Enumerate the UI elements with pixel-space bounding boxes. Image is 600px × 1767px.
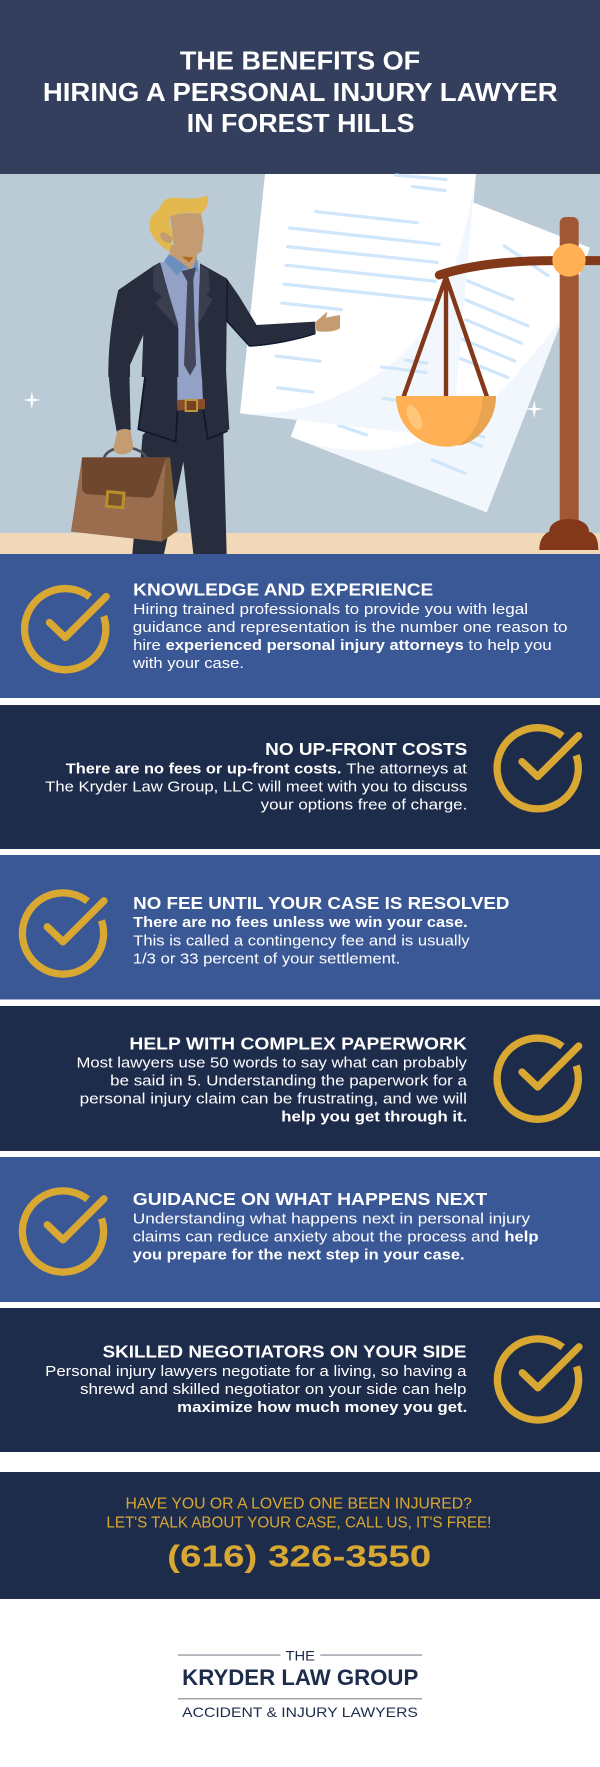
- lower body and briefcase: [71, 370, 229, 554]
- panel: guidance on what happens next: [0, 1157, 600, 1302]
- body text: experienced personal injury attorneys: [166, 637, 464, 654]
- face: [170, 213, 204, 258]
- body text: be said in 5. Understanding the paperwork for a: [110, 1072, 468, 1089]
- body text: claims can reduce anxiety about the process and: [133, 1228, 499, 1245]
- lapels: [153, 263, 213, 328]
- pointing hand: [315, 312, 340, 332]
- tie: [181, 268, 196, 376]
- lawyer figure: [71, 196, 340, 554]
- body text: hire: [133, 637, 161, 654]
- icon: sparkle right: [525, 400, 544, 418]
- title: IN FOREST HILLS: [187, 108, 414, 138]
- body text: 1/3 or 33 percent of your settlement.: [133, 950, 400, 967]
- heading: KNOWLEDGE AND EXPERIENCE: [133, 580, 433, 600]
- logo: The Kryder Law Group: [178, 1647, 422, 1720]
- header banner: [0, 0, 600, 174]
- belt: [177, 399, 205, 411]
- front document: [240, 174, 476, 438]
- callout text: [106, 1495, 491, 1531]
- jacket: [108, 262, 316, 377]
- body text: There are no fees unless we win your case.: [133, 914, 468, 931]
- icon: gold check circle: [22, 1191, 104, 1272]
- illustration: lawyer with documents and scale: [0, 174, 600, 554]
- body text: help you get through it.: [281, 1108, 467, 1125]
- title: [43, 46, 558, 138]
- body text: [76, 1054, 468, 1125]
- heading: SKILLED NEGOTIATORS ON YOUR SIDE: [103, 1342, 467, 1362]
- body text: to help you: [468, 637, 552, 654]
- heading: HELP WITH COMPLEX PAPERWORK: [129, 1033, 467, 1053]
- panel: skilled negotiators: [0, 1308, 600, 1452]
- collar: [164, 254, 198, 276]
- body text: [133, 1210, 539, 1263]
- body text: There are no fees or up-front costs.: [66, 760, 341, 777]
- body text: with your case.: [132, 655, 244, 672]
- body text: The Kryder Law Group, LLC will meet with you to discuss: [45, 778, 467, 795]
- heading: NO FEE UNTIL YOUR CASE IS RESOLVED: [133, 893, 509, 913]
- body text: guidance and representation is the number one reason to: [133, 619, 568, 636]
- shirt lower: [177, 370, 205, 401]
- icon: gold check circle: [497, 728, 579, 809]
- body text: This is called a contingency fee and is usually: [133, 932, 470, 949]
- body text: help: [504, 1228, 538, 1245]
- panel: no fee until resolved: [0, 855, 600, 1000]
- body text: Hiring trained professionals to provide you with legal: [133, 601, 528, 618]
- body text: personal injury claim can be frustrating, and we will: [80, 1090, 467, 1107]
- scale post and base: [539, 217, 598, 550]
- panel: complex paperwork: [0, 1006, 600, 1151]
- call to action band: [0, 1472, 600, 1599]
- body text: [133, 914, 470, 967]
- body text: Most lawyers use 50 words to say what can probably: [76, 1054, 467, 1071]
- title: THE BENEFITS OF: [180, 46, 420, 76]
- icon: gold check circle: [497, 1038, 579, 1119]
- body text: [45, 1363, 467, 1416]
- body text: Understanding what happens next in personal injury: [133, 1210, 531, 1227]
- shirt: [159, 260, 203, 377]
- panel: no up-front costs: [0, 705, 600, 849]
- hair: [149, 196, 208, 252]
- hand on briefcase: [114, 429, 133, 454]
- icon: gold check circle: [22, 893, 104, 974]
- panel: knowledge and experience: [0, 554, 600, 698]
- heading: NO UP-FRONT COSTS: [265, 739, 467, 759]
- scale beam and pan: [396, 243, 600, 447]
- body text: you prepare for the next step in your case.: [133, 1246, 465, 1263]
- logo: The Kryder Law Group: THE: [286, 1647, 315, 1663]
- briefcase: [71, 447, 178, 542]
- icon: gold check circle: [25, 589, 106, 670]
- icon: sparkle left: [23, 391, 41, 410]
- body text: Personal injury lawyers negotiate for a living, so having a: [45, 1363, 467, 1380]
- neck: [169, 245, 198, 270]
- logo: The Kryder Law Group: KRYDER LAW GROUP: [182, 1665, 418, 1690]
- trousers: [132, 403, 227, 554]
- title: HIRING A PERSONAL INJURY LAWYER: [43, 77, 558, 107]
- phone number: (616) 326-3550: [167, 1539, 431, 1574]
- body text: shrewd and skilled negotiator on your side can help: [80, 1381, 466, 1398]
- upper body: [108, 196, 340, 377]
- callout text: HAVE YOU OR A LOVED ONE BEEN INJURED?: [126, 1495, 472, 1512]
- body text: [45, 760, 468, 813]
- body text: [132, 601, 568, 672]
- body text: maximize how much money you get.: [177, 1399, 467, 1416]
- body text: The attorneys at: [346, 760, 468, 777]
- icon: gold check circle: [497, 1339, 579, 1420]
- callout text: LET'S TALK ABOUT YOUR CASE, CALL US, IT'S FREE!: [106, 1514, 491, 1531]
- body text: your options free of charge.: [261, 796, 467, 813]
- jacket lower: [108, 370, 229, 442]
- back document: [291, 203, 590, 512]
- heading: GUIDANCE ON WHAT HAPPENS NEXT: [133, 1189, 488, 1209]
- logo: The Kryder Law Group: ACCIDENT & INJURY LAWYERS: [182, 1704, 418, 1720]
